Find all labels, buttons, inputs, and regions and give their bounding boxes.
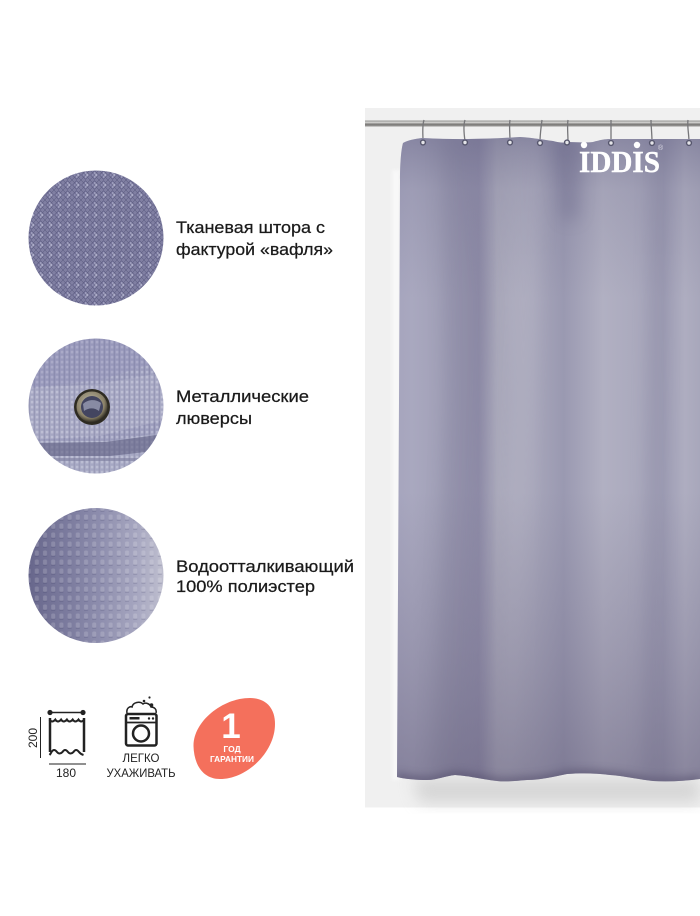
icon: washing machine easy care	[106, 696, 176, 780]
brand logo: ®	[658, 144, 664, 152]
panel: waffle texture feature	[28, 170, 333, 306]
brand logo: IDDIS	[579, 144, 660, 179]
feature text: polyester: 100% полиэстер	[176, 577, 315, 596]
panel: water repellent feature	[28, 508, 359, 644]
badge: one year warranty: ГАРАНТИИ	[210, 754, 254, 764]
photo circle: polyester	[28, 508, 164, 644]
panel: metal grommets feature	[28, 338, 314, 474]
feature text: grommets: люверсы	[176, 409, 252, 428]
grommet	[74, 389, 110, 425]
icon: curtain size 180 by 200	[26, 710, 86, 780]
badge: one year warranty: ГОД	[223, 744, 241, 754]
icon: curtain size 180 by 200: 180	[56, 766, 76, 780]
photo circle: waffle fabric	[28, 170, 164, 306]
curtain fabric	[395, 130, 700, 785]
curtain hooks	[423, 120, 689, 142]
curtain floor shadow	[412, 779, 700, 802]
photo circle: grommet	[28, 338, 164, 474]
icon: washing machine easy care: ЛЕГКО	[123, 753, 160, 765]
panel: product photo	[365, 108, 700, 808]
icon: washing machine easy care: УХАЖИВАТЬ	[106, 768, 176, 780]
badge: one year warranty: 1	[221, 707, 241, 746]
feature text: waffle fabric: фактурой «вафля»	[176, 240, 333, 259]
curtain grommets	[421, 140, 691, 145]
curtain rod	[365, 120, 700, 126]
icon: curtain size 180 by 200: 200	[26, 728, 40, 748]
feature text: polyester: Водоотталкивающий	[176, 557, 354, 576]
feature text: grommets: Металлические	[176, 387, 309, 406]
badge: one year warranty	[193, 698, 275, 779]
feature text: waffle fabric: Тканевая штора с	[176, 218, 326, 237]
